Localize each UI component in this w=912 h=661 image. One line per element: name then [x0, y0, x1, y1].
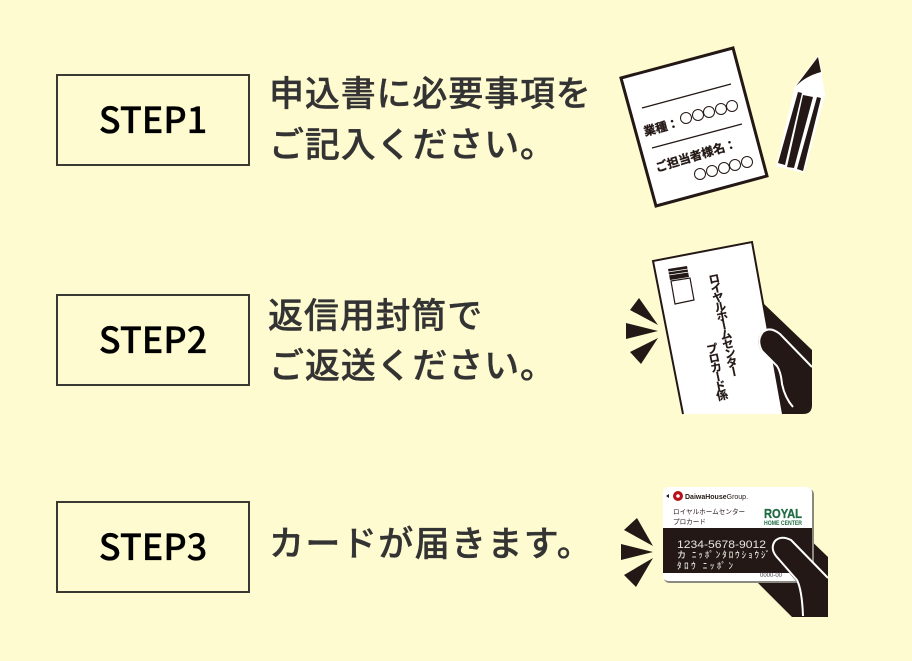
icon: application form: ご担当者様名： — [653, 135, 739, 176]
icon: hand holding card: ROYAL — [764, 506, 802, 521]
icon: application form: 業種： — [642, 114, 681, 140]
icon: hand holding card: 0000-00 — [760, 573, 783, 579]
icon: hand holding card — [663, 487, 828, 617]
icon: hand holding card: 1234-5678-9012 — [677, 539, 766, 551]
step 3 badge — [57, 502, 249, 592]
step 2 badge — [57, 295, 249, 385]
step 3 badge: STEP3 — [99, 519, 207, 571]
icon: application form — [621, 48, 767, 206]
step 1 text: 申込書に必要事項を — [269, 66, 592, 117]
icon: hand holding envelope: プロカード係 — [703, 341, 731, 403]
icon: hand holding envelope — [653, 242, 812, 414]
step 2 badge: STEP2 — [99, 312, 207, 364]
step 2 text: ご返送ください。 — [269, 338, 556, 389]
icon: hand holding card: ﾀﾛｳ ﾆｯﾎﾟﾝ — [677, 559, 733, 572]
step 1 text: ご記入ください。 — [269, 117, 556, 168]
step 2 text — [268, 288, 556, 389]
icon: hand holding card: HOME CENTER — [764, 521, 803, 527]
icon: hand holding card: カ ﾆｯﾎﾟﾝﾀﾛｳｼｮｳｼﾞ — [677, 548, 770, 561]
icon: hand holding card: DaiwaHouseGroup. — [685, 494, 748, 501]
icon: burst marks — [626, 298, 658, 364]
icon: hand holding card: プロカード — [673, 516, 706, 526]
step 1 badge — [57, 75, 249, 165]
icon: hand holding envelope: ロイヤルホームセンター — [705, 271, 743, 377]
step 1 badge: STEP1 — [99, 92, 207, 144]
icon: pencil — [776, 55, 825, 173]
step 3 text: カードが届きます。 — [269, 516, 593, 567]
icon: burst marks — [621, 518, 653, 587]
step 1 text — [269, 66, 592, 168]
icon: hand holding card: ロイヤルホームセンター — [673, 506, 745, 516]
step 2 text: 返信用封筒で — [268, 288, 483, 339]
